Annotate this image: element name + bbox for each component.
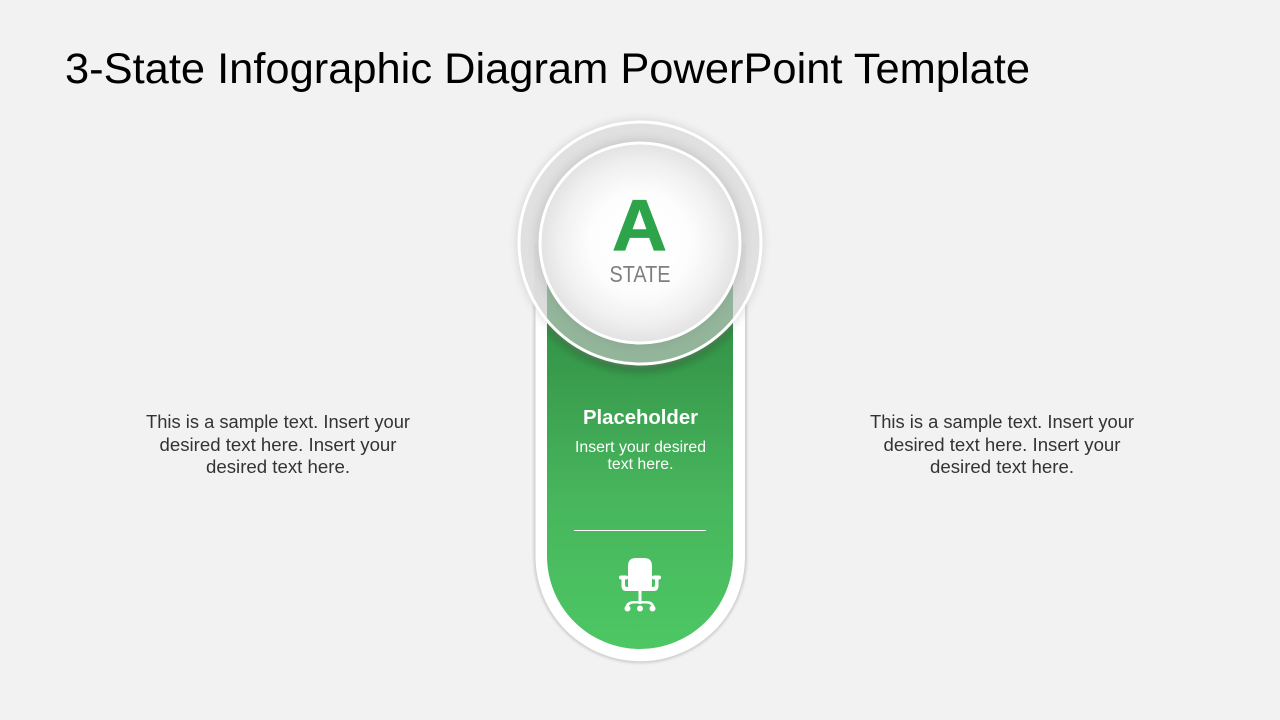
right text block: This is a sample text. Insert your	[870, 412, 1134, 432]
panel text	[575, 439, 706, 473]
pill green body	[547, 243, 733, 649]
left text block	[146, 412, 410, 477]
left text block: desired text here.	[206, 457, 350, 477]
panel: state A pill	[532, 302, 748, 664]
panel: state A badge	[516, 119, 764, 400]
left text block: This is a sample text. Insert your	[146, 412, 410, 432]
title: 3-State Infographic Diagram PowerPoint Template	[65, 45, 1030, 93]
state label: STATE	[610, 261, 670, 287]
panel text: Insert your desired	[575, 439, 706, 456]
outer ring shadow	[516, 119, 764, 367]
right text block: desired text here.	[930, 457, 1074, 477]
pill outer rim	[534, 243, 747, 663]
inner ball shadow	[535, 138, 745, 348]
icon: office chair	[619, 558, 661, 612]
right text block	[870, 412, 1134, 477]
right text block: desired text here. Insert your	[884, 435, 1120, 455]
left text block: desired text here. Insert your	[160, 435, 396, 455]
outer translucent ring	[518, 120, 762, 366]
letter A: A	[612, 186, 667, 266]
panel text: text here.	[608, 456, 674, 473]
ring shadow on green	[547, 323, 733, 374]
panel heading: Placeholder	[583, 407, 698, 429]
inner ball	[540, 143, 740, 343]
